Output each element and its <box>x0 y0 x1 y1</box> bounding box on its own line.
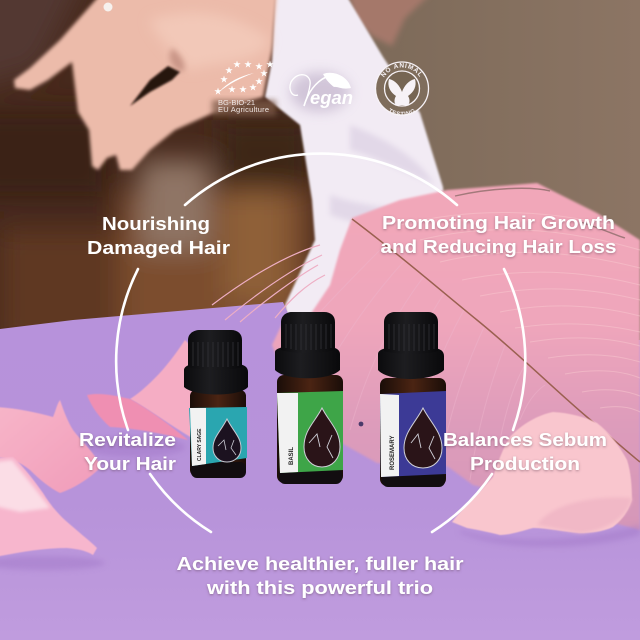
text: revitalize your hair: Your Hair <box>84 454 176 474</box>
text: nourishing damaged hair: Nourishing <box>102 214 210 234</box>
feather quill <box>352 219 640 462</box>
label <box>189 407 247 466</box>
petal shadows <box>0 437 640 570</box>
lower barbs <box>290 245 545 480</box>
label <box>380 391 446 477</box>
text: revitalize your hair: Revitalize <box>79 430 176 450</box>
icon: EU organic leaf badge: BG-BIO-21 <box>218 98 255 107</box>
drop icon <box>404 408 442 468</box>
product: basil bottle: BASIL <box>289 447 295 465</box>
background photo: white sleeve <box>265 0 447 325</box>
text: achieve healthier fuller hair: with this powerful trio <box>206 578 433 598</box>
feather dark tips <box>455 188 625 238</box>
cap <box>384 312 438 354</box>
text: nourishing damaged hair <box>87 214 230 258</box>
feather dark speck <box>359 422 363 426</box>
text: promoting hair growth: and Reducing Hair Loss <box>380 237 616 257</box>
ring <box>104 2 112 12</box>
icon: EU organic leaf badge: ★ <box>266 60 275 70</box>
icon: EU organic leaf badge: ★ <box>244 60 253 70</box>
icon: EU organic leaf badge: EU Agriculture <box>218 105 269 114</box>
icon: EU organic leaf badge: ★ <box>220 74 229 86</box>
product: rosemary bottle <box>378 312 446 487</box>
drop icon <box>213 419 241 462</box>
icon: EU organic leaf badge: ★ <box>214 86 223 98</box>
icon: EU organic leaf badge: ★ <box>225 66 234 76</box>
gap between fingers <box>130 66 180 106</box>
background photo: hand <box>14 0 277 170</box>
feather wisps <box>212 245 325 322</box>
icon: no animal testing badge: TESTING <box>390 108 415 114</box>
table surface <box>0 302 640 640</box>
background photo: brown hair <box>0 0 320 345</box>
product: clary sage bottle: CLARY SAGE <box>197 428 203 461</box>
upper barbs <box>400 212 640 412</box>
icon: EU organic leaf badge: ★ <box>260 68 269 80</box>
collar <box>378 348 444 379</box>
icon: EU organic leaf badge: ★ <box>255 76 264 88</box>
icon: EU organic leaf badge: ★ <box>228 84 237 96</box>
shade behind badge caption <box>212 100 276 116</box>
right petal <box>452 412 632 535</box>
product: basil bottle <box>275 312 343 484</box>
text: achieve healthier fuller hair <box>176 554 464 598</box>
icon: EU organic leaf badge: ★ <box>239 84 248 96</box>
cap <box>281 312 335 353</box>
label <box>277 391 343 473</box>
icon: EU organic leaf badge <box>212 60 276 116</box>
icon: no animal testing badge <box>376 61 430 114</box>
text: revitalize your hair <box>79 430 176 474</box>
icon: vegan logo: egan <box>310 88 353 108</box>
icon: no animal testing badge: NO ANIMAL <box>380 63 422 78</box>
text: promoting hair growth <box>380 213 616 257</box>
product: rosemary bottle: ROSEMARY <box>390 436 396 470</box>
collar <box>184 364 248 394</box>
icon: EU organic leaf badge: ★ <box>255 62 264 72</box>
circular frame arcs <box>116 154 525 532</box>
icon: EU organic leaf badge: ★ <box>249 82 258 94</box>
drop icon <box>304 408 340 467</box>
product: clary sage bottle <box>184 330 248 478</box>
icon: EU organic leaf badge: ★ <box>233 60 242 70</box>
lower left petal <box>0 457 97 557</box>
text: balances sebum production: Balances Sebum <box>443 430 607 450</box>
text: achieve healthier fuller hair: Achieve healthier, fuller hair <box>176 554 464 574</box>
upper middle petal <box>130 340 195 438</box>
large left petal <box>0 400 101 493</box>
pink feather <box>212 183 640 530</box>
collar <box>275 347 340 378</box>
lower middle petal <box>87 394 188 440</box>
background photo: wall <box>0 0 640 340</box>
rose petals <box>0 340 640 570</box>
text: promoting hair growth: Promoting Hair Growth <box>382 213 615 233</box>
icon: vegan logo <box>290 73 353 108</box>
text: nourishing damaged hair: Damaged Hair <box>87 238 230 258</box>
lavender shade behind vegan logo <box>290 72 350 112</box>
cap <box>188 330 242 370</box>
text: balances sebum production: Production <box>470 454 580 474</box>
text: balances sebum production <box>443 430 607 474</box>
background photo: distant blurred hand <box>345 0 445 46</box>
